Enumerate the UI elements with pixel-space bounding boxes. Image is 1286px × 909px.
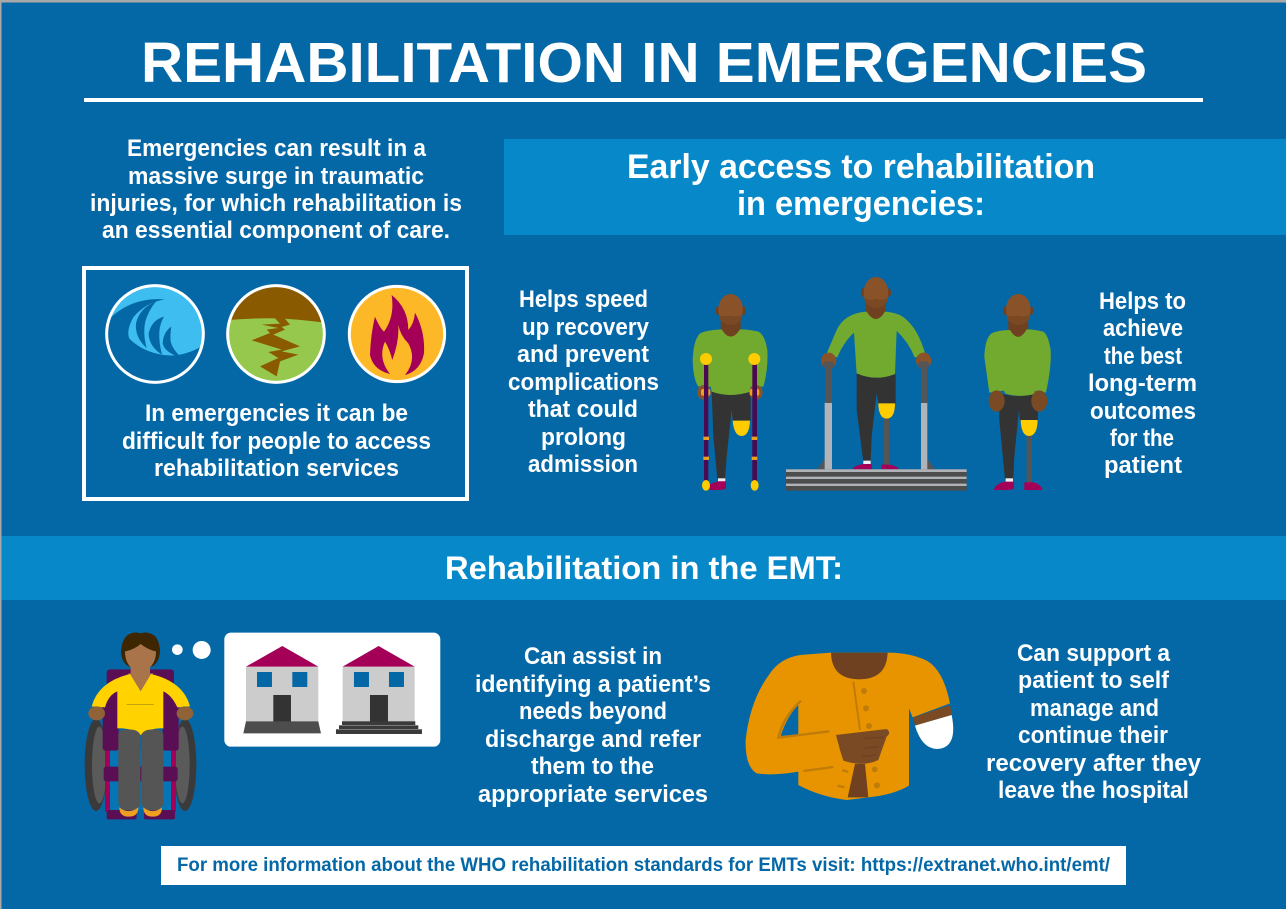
text: long-term outcomes: for the <box>1110 425 1174 452</box>
icon: house with steps <box>336 646 422 734</box>
text: long-term outcomes: the best <box>1104 343 1182 370</box>
heading band: rehabilitation in the EMT <box>2 536 1286 600</box>
text: speed recovery <box>508 286 659 478</box>
panel: access difficulties <box>84 268 467 499</box>
intro text block: an essential component of care. <box>102 217 450 244</box>
text: speed recovery: complications <box>508 369 659 396</box>
text: long-term outcomes: long-term <box>1088 370 1197 397</box>
illustration: patient in cardigan with arm amputation <box>746 653 953 800</box>
illustration: patient progress figures <box>693 277 1051 491</box>
text: self management: recovery after they <box>986 750 1202 777</box>
text: speed recovery: Helps speed <box>519 286 648 313</box>
figure: man standing with prosthetic <box>984 294 1051 490</box>
text: long-term outcomes: Helps to <box>1099 288 1186 315</box>
title: REHABILITATION IN EMERGENCIES <box>141 31 1147 95</box>
access text: rehabilitation services <box>154 455 399 482</box>
text: self management: manage and <box>1030 695 1159 722</box>
text: self management <box>986 640 1202 804</box>
text: identifying needs: identifying a patient’s <box>475 671 711 698</box>
text: speed recovery: that could <box>528 396 638 423</box>
figure: man on crutches <box>693 294 767 491</box>
footer link box: For more information about the WHO rehabilitation standards for EMTs visit: https://extranet.who.int/emt/ <box>177 855 1111 876</box>
figure: person in wheelchair <box>85 632 196 819</box>
text: long-term outcomes: patient <box>1104 452 1182 479</box>
intro text block: injuries, for which rehabilitation is <box>90 190 462 217</box>
text: long-term outcomes: outcomes <box>1090 398 1196 425</box>
heading band: early access: in emergencies: <box>737 185 985 223</box>
text: self management: Can support a <box>1017 640 1171 667</box>
heading band: rehabilitation in the EMT: Rehabilitation in the EMT: <box>445 550 843 586</box>
text: self management: continue their <box>1018 722 1168 749</box>
illustration: wheelchair user thinking of home access <box>85 632 440 819</box>
intro text block <box>90 135 462 244</box>
heading band: early access: Early access to rehabilitation <box>627 148 1095 186</box>
access text <box>122 400 431 482</box>
footer link box <box>161 846 1126 885</box>
thought bubbles <box>172 641 211 659</box>
text: identifying needs: Can assist in <box>524 643 662 670</box>
text: speed recovery: admission <box>528 451 638 478</box>
text: self management: patient to self <box>1018 667 1170 694</box>
text: identifying needs: needs beyond <box>519 698 667 725</box>
icon: earthquake crack <box>225 283 327 382</box>
text: self management: leave the hospital <box>998 777 1189 804</box>
text: long-term outcomes: achieve <box>1103 315 1183 342</box>
text: identifying needs <box>475 643 711 808</box>
text: speed recovery: and prevent <box>517 341 649 368</box>
intro text block: Emergencies can result in a <box>127 135 427 162</box>
text: identifying needs: discharge and refer <box>485 726 701 753</box>
heading band: early access <box>504 139 1286 235</box>
panel: houses <box>224 633 440 747</box>
figure: man at parallel bars <box>786 277 967 491</box>
access text: In emergencies it can be <box>145 400 408 427</box>
icon: fire <box>349 286 445 382</box>
text: speed recovery: up recovery <box>522 314 650 341</box>
icon: house with ramp <box>243 646 321 733</box>
text: long-term outcomes <box>1088 288 1197 479</box>
access text: difficult for people to access <box>122 428 431 455</box>
icon: tsunami wave <box>102 286 207 387</box>
text: identifying needs: appropriate services <box>478 781 708 808</box>
intro text block: massive surge in traumatic <box>128 163 424 190</box>
text: identifying needs: them to the <box>531 753 654 780</box>
text: speed recovery: prolong <box>541 424 626 451</box>
